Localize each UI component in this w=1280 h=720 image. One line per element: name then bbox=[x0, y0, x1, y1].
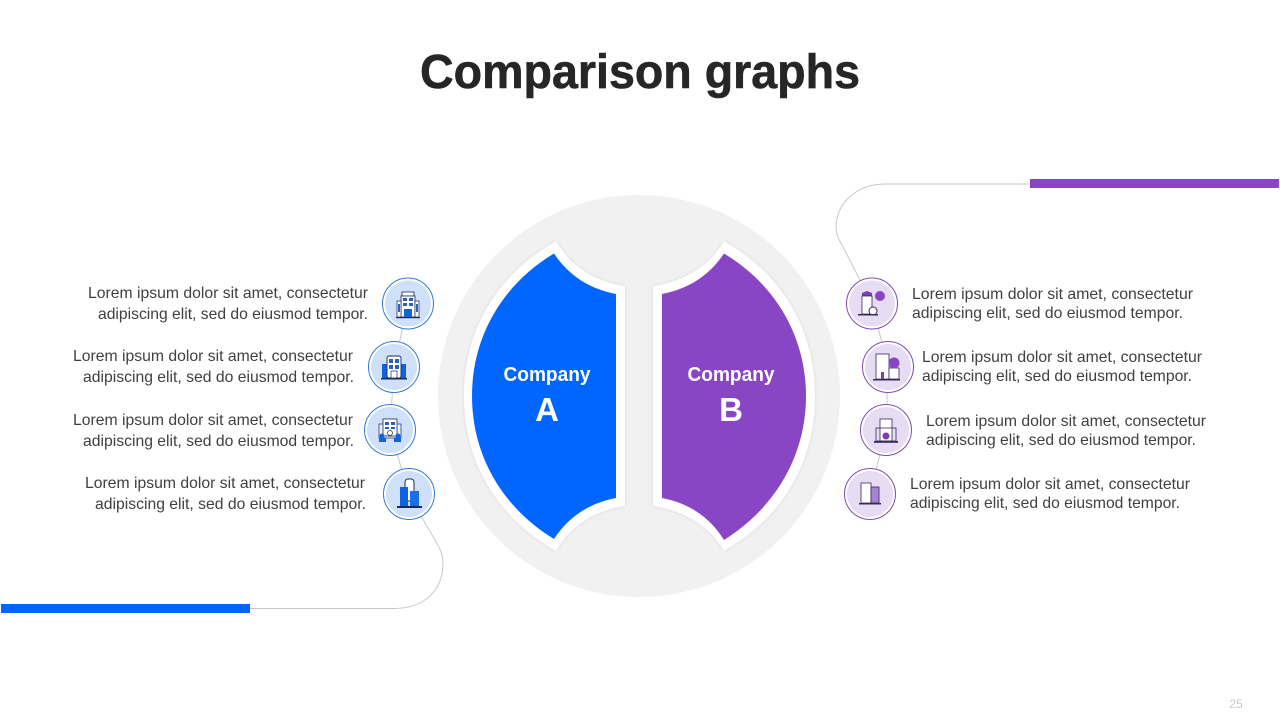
text block: right 2 bbox=[922, 349, 1203, 385]
connector: right curve bbox=[836, 184, 1030, 494]
text block: left 1: adipiscing elit, sed do eiusmod tempor. bbox=[98, 306, 368, 323]
text block: right 4 bbox=[910, 476, 1191, 512]
background circle bbox=[438, 195, 840, 597]
icon: right 4 towers bbox=[844, 468, 896, 520]
icon: right 3 campus building bbox=[860, 404, 912, 456]
text block: left 1: Lorem ipsum dolor sit amet, consectetur bbox=[88, 285, 369, 302]
text block: right 1 bbox=[912, 286, 1194, 322]
icon: left 4 skyscraper bbox=[384, 468, 434, 520]
label: letter B: B bbox=[719, 391, 743, 428]
text block: left 4 bbox=[85, 475, 366, 513]
text block: left 3 bbox=[73, 412, 354, 450]
panel: company B bbox=[653, 241, 815, 551]
accent bar: purple bbox=[1030, 179, 1279, 188]
text block: right 3: Lorem ipsum dolor sit amet, consectetur bbox=[926, 413, 1207, 430]
connector: left curve bbox=[250, 303, 443, 608]
icon: left 2 apartment bbox=[368, 342, 420, 392]
text block: right 2: adipiscing elit, sed do eiusmod tempor. bbox=[922, 368, 1192, 385]
text block: right 1: Lorem ipsum dolor sit amet, consectetur bbox=[912, 286, 1194, 303]
text block: left 2: Lorem ipsum dolor sit amet, consectetur bbox=[73, 348, 354, 365]
panel: company A bbox=[464, 241, 625, 551]
text block: left 4: adipiscing elit, sed do eiusmod tempor. bbox=[95, 496, 366, 513]
text block: left 2 bbox=[73, 348, 354, 386]
label: company B: Company bbox=[688, 364, 775, 386]
icon: right 2 building with coin bbox=[862, 342, 914, 392]
label: letter A: A bbox=[535, 391, 559, 428]
icon: right 1 building with clock bbox=[846, 278, 898, 329]
text block: right 2: Lorem ipsum dolor sit amet, consectetur bbox=[922, 349, 1203, 366]
text block: left 4: Lorem ipsum dolor sit amet, consectetur bbox=[85, 475, 366, 492]
text block: right 4: adipiscing elit, sed do eiusmod tempor. bbox=[910, 495, 1180, 512]
text block: left 1 bbox=[88, 285, 369, 323]
page number: 25 bbox=[1229, 697, 1243, 711]
icon: left 3 building with people bbox=[364, 404, 416, 456]
text block: left 3: Lorem ipsum dolor sit amet, consectetur bbox=[73, 412, 354, 429]
text block: left 3: adipiscing elit, sed do eiusmod tempor. bbox=[83, 433, 354, 450]
text block: left 2: adipiscing elit, sed do eiusmod tempor. bbox=[83, 369, 354, 386]
accent bar: blue bbox=[1, 604, 250, 613]
text block: right 1: adipiscing elit, sed do eiusmod tempor. bbox=[912, 305, 1183, 322]
label: company A: Company bbox=[504, 364, 591, 386]
title: Comparison graphs bbox=[420, 46, 860, 99]
text block: right 3 bbox=[926, 413, 1207, 449]
text block: right 3: adipiscing elit, sed do eiusmod tempor. bbox=[926, 432, 1196, 449]
icon: left 1 office building bbox=[382, 278, 434, 329]
text block: right 4: Lorem ipsum dolor sit amet, consectetur bbox=[910, 476, 1191, 493]
